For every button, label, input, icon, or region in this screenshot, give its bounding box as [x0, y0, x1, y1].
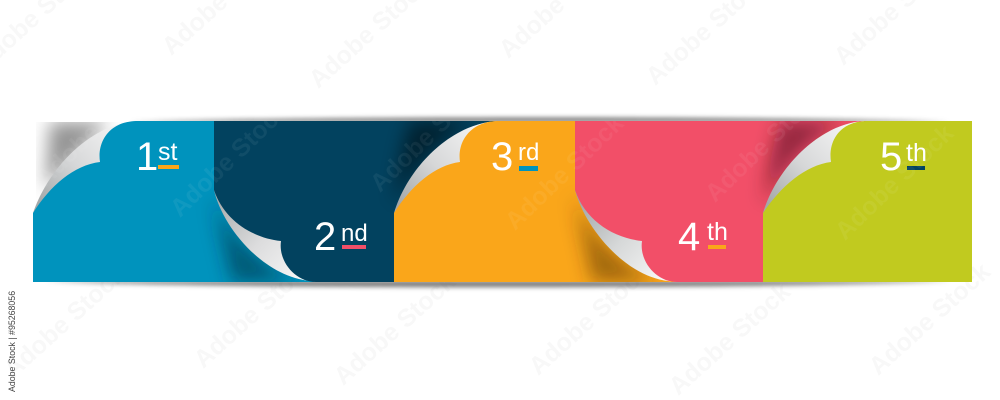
label: 4th: th [707, 218, 728, 246]
page curl: panel 1 [33, 121, 136, 213]
shadow on blue under curl 2 [214, 195, 300, 282]
navy shape [214, 121, 500, 282]
watermark on background: Adobe Stock [664, 277, 796, 400]
watermark on band: Adobe Stock [365, 71, 494, 197]
panel 5: green step [763, 121, 972, 282]
shadow on navy above curl 3 [390, 121, 470, 196]
panel 3: orange step [394, 121, 680, 282]
shadow on red above curl 5 [765, 121, 848, 205]
label: 3rd: 3 [491, 135, 513, 179]
label: 5th: th [906, 139, 927, 167]
blue shape [33, 121, 330, 282]
watermark on band: Adobe Stock [700, 81, 829, 207]
label: 4th [678, 215, 728, 259]
orange shape [394, 121, 680, 282]
label: 3rd [491, 135, 539, 179]
curl shadow: panel 1 [45, 122, 108, 190]
watermark on band [173, 121, 954, 240]
panel 2: navy step [214, 121, 500, 282]
label: 5th [880, 135, 927, 179]
page curl: panel 5 [763, 121, 864, 213]
label: 2nd: 2 [314, 215, 336, 259]
watermark on background: Adobe Stock [329, 267, 461, 391]
label: 1st: st [158, 138, 178, 166]
label: 2nd [314, 215, 368, 259]
page curl: panel 4 [575, 190, 677, 282]
label: 5th: 5 [880, 135, 902, 179]
label: 2nd: nd [341, 220, 368, 247]
page curl: panel 2 [214, 190, 316, 282]
watermark on band: Adobe Stock [30, 66, 159, 192]
watermark on band: Adobe Stock [500, 109, 629, 235]
stock id side text: Adobe Stock | #95268056 [7, 291, 17, 392]
label: 1st [136, 135, 179, 179]
watermark on background: Adobe Stock [524, 257, 656, 381]
green shape [763, 121, 972, 282]
watermark on background: Adobe Stock [0, 260, 131, 384]
shadow on orange under curl 4 [575, 195, 660, 282]
watermark on background: Adobe Stock [189, 250, 321, 374]
red shape [575, 121, 880, 282]
panel 1: blue step [33, 121, 330, 282]
watermark on band: Adobe Stock [165, 96, 294, 222]
band drop shadows [45, 118, 950, 287]
page curl: panel 3 [394, 121, 497, 213]
label: 3rd: rd [518, 139, 539, 166]
panel 4: red step [575, 121, 880, 282]
watermark on band: Adobe Stock [830, 119, 959, 245]
label: 1st: 1 [136, 135, 158, 179]
label: 4th: 4 [678, 215, 700, 259]
watermark on background: Adobe Stock [864, 257, 996, 381]
